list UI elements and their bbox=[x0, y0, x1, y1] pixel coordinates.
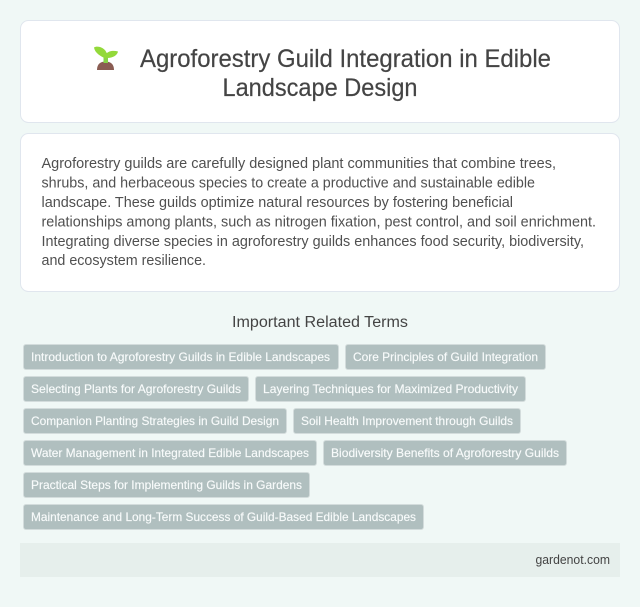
text block: description: landscape. These guilds optimize natural resources by fostering beneficial bbox=[42, 195, 513, 211]
text block: description: Agroforestry guilds are carefully designed plant communities that combine trees, bbox=[42, 156, 556, 172]
tag: selecting plants: Selecting Plants for Agroforestry Guilds bbox=[31, 382, 241, 396]
title: Agroforestry Guild Integration in Edible bbox=[140, 45, 551, 73]
tag: core principles bbox=[346, 344, 546, 370]
tag: water management bbox=[24, 440, 316, 466]
text block: description: shrubs, and herbaceous species to create a productive and sustainable edible bbox=[42, 176, 535, 192]
panel: title card bbox=[20, 20, 620, 122]
title bbox=[140, 45, 551, 102]
tag: biodiversity: Biodiversity Benefits of Agroforestry Guilds bbox=[331, 446, 559, 460]
tag: core principles: Core Principles of Guild Integration bbox=[353, 350, 538, 364]
tag: companion planting bbox=[24, 408, 286, 434]
heading: related terms: Important Related Terms bbox=[232, 314, 408, 331]
tag: maintenance bbox=[24, 504, 424, 530]
tag: maintenance: Maintenance and Long-Term Success of Guild-Based Edible Landscapes bbox=[31, 510, 416, 524]
icon: sprout bbox=[94, 47, 118, 70]
tag: introduction: Introduction to Agroforestry Guilds in Edible Landscapes bbox=[31, 350, 330, 364]
tag: selecting plants bbox=[24, 376, 248, 402]
tag: practical steps: Practical Steps for Implementing Guilds in Gardens bbox=[31, 478, 302, 492]
panel: description bbox=[20, 134, 620, 292]
footer: gardenot.com bbox=[536, 553, 610, 567]
tag: layering techniques bbox=[256, 376, 526, 402]
title: Landscape Design bbox=[222, 74, 418, 102]
tag: soil health bbox=[294, 408, 520, 434]
text block: description: relationships among plants, such as nitrogen fixation, pest control, and soil enrichment. bbox=[42, 214, 596, 230]
tag: practical steps bbox=[24, 472, 310, 498]
text block: description: Integrating diverse species in agroforestry guilds enhances food security, biodiversity, bbox=[42, 234, 584, 250]
tag: water management: Water Management in Integrated Edible Landscapes bbox=[31, 446, 309, 460]
tag list bbox=[24, 344, 566, 530]
text block: description bbox=[42, 156, 596, 269]
tag: soil health: Soil Health Improvement through Guilds bbox=[301, 414, 513, 428]
tag: introduction bbox=[24, 344, 338, 370]
tag: companion planting: Companion Planting Strategies in Guild Design bbox=[31, 414, 279, 428]
text block: description: and ecosystem resilience. bbox=[42, 253, 206, 269]
tag: biodiversity bbox=[324, 440, 566, 466]
footer bbox=[20, 543, 620, 577]
tag: layering techniques: Layering Techniques for Maximized Productivity bbox=[263, 382, 518, 396]
